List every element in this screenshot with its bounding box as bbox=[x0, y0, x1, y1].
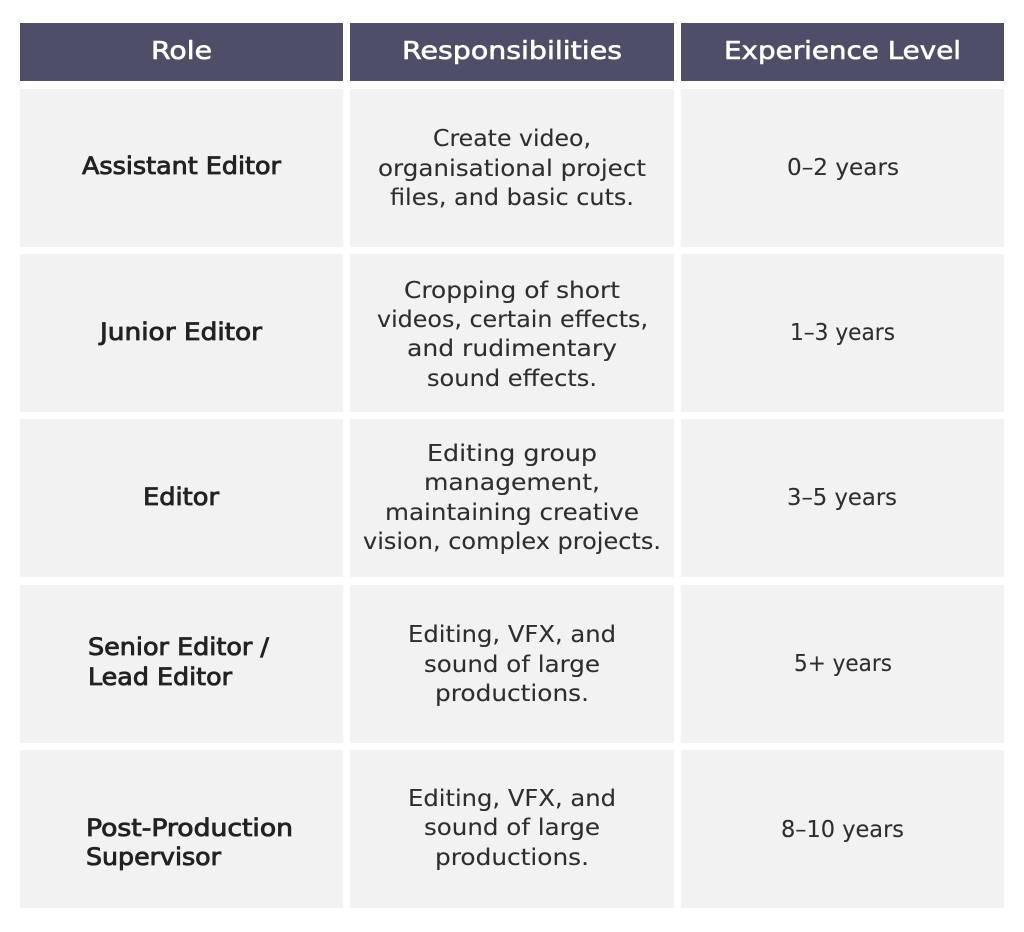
responsibilities cell: and rudimentary bbox=[407, 334, 617, 362]
role cell: Supervisor bbox=[86, 843, 221, 871]
responsibilities cell: sound of large bbox=[424, 813, 600, 841]
header: Role: Role bbox=[151, 36, 212, 65]
responsibilities cell: Editing, VFX, and bbox=[408, 784, 616, 812]
experience cell: 1–3 years bbox=[790, 318, 895, 346]
responsibilities cell: Cropping of short bbox=[404, 276, 620, 304]
responsibilities cell bbox=[350, 585, 674, 743]
role cell bbox=[20, 750, 343, 908]
role cell: Assistant Editor bbox=[82, 152, 281, 180]
responsibilities cell: Editing, VFX, and bbox=[408, 620, 616, 648]
responsibilities cell: organisational project bbox=[378, 154, 646, 182]
role cell: Post-Production bbox=[86, 814, 293, 842]
responsibilities cell: sound effects. bbox=[427, 364, 597, 392]
header: Responsibilities bbox=[350, 23, 674, 81]
row: Assistant Editor bbox=[20, 89, 1004, 247]
row: Post-Production Supervisor bbox=[20, 750, 1004, 908]
row: Junior Editor bbox=[20, 254, 1004, 412]
responsibilities cell: productions. bbox=[435, 843, 589, 871]
row: Senior Editor / Lead Editor bbox=[20, 585, 1004, 743]
experience cell: 0–2 years bbox=[787, 153, 899, 181]
role cell bbox=[20, 585, 343, 743]
responsibilities cell bbox=[350, 89, 674, 247]
role cell: Lead Editor bbox=[88, 663, 232, 691]
role cell: Junior Editor bbox=[98, 318, 262, 346]
experience cell: 5+ years bbox=[794, 649, 892, 677]
header row bbox=[20, 23, 1004, 81]
experience cell bbox=[681, 89, 1004, 247]
responsibilities cell: productions. bbox=[435, 679, 589, 707]
header: Responsibilities: Responsibilities bbox=[402, 36, 622, 65]
experience cell bbox=[681, 750, 1004, 908]
responsibilities cell: videos, certain effects, bbox=[377, 305, 648, 333]
experience cell: 8–10 years bbox=[781, 815, 904, 843]
responsibilities cell: maintaining creative bbox=[385, 498, 639, 526]
responsibilities cell bbox=[350, 750, 674, 908]
role cell bbox=[20, 89, 343, 247]
row: Editor bbox=[20, 419, 1004, 577]
responsibilities cell: Editing group bbox=[427, 439, 597, 467]
responsibilities cell bbox=[350, 419, 674, 577]
role cell: Editor bbox=[143, 483, 219, 511]
responsibilities cell: files, and basic cuts. bbox=[390, 183, 634, 211]
responsibilities cell: Create video, bbox=[433, 124, 591, 152]
responsibilities cell: vision, complex projects. bbox=[363, 527, 661, 555]
responsibilities cell: sound of large bbox=[424, 650, 600, 678]
experience cell bbox=[681, 419, 1004, 577]
responsibilities cell bbox=[350, 254, 674, 412]
header: Experience Level: Experience Level bbox=[724, 36, 961, 65]
header: Experience Level bbox=[681, 23, 1004, 81]
experience cell bbox=[681, 585, 1004, 743]
role cell: Senior Editor / bbox=[88, 633, 270, 661]
responsibilities cell: management, bbox=[424, 468, 600, 496]
role cell bbox=[20, 254, 343, 412]
experience cell bbox=[681, 254, 1004, 412]
header: Role bbox=[20, 23, 343, 81]
experience cell: 3–5 years bbox=[787, 483, 897, 511]
role cell bbox=[20, 419, 343, 577]
